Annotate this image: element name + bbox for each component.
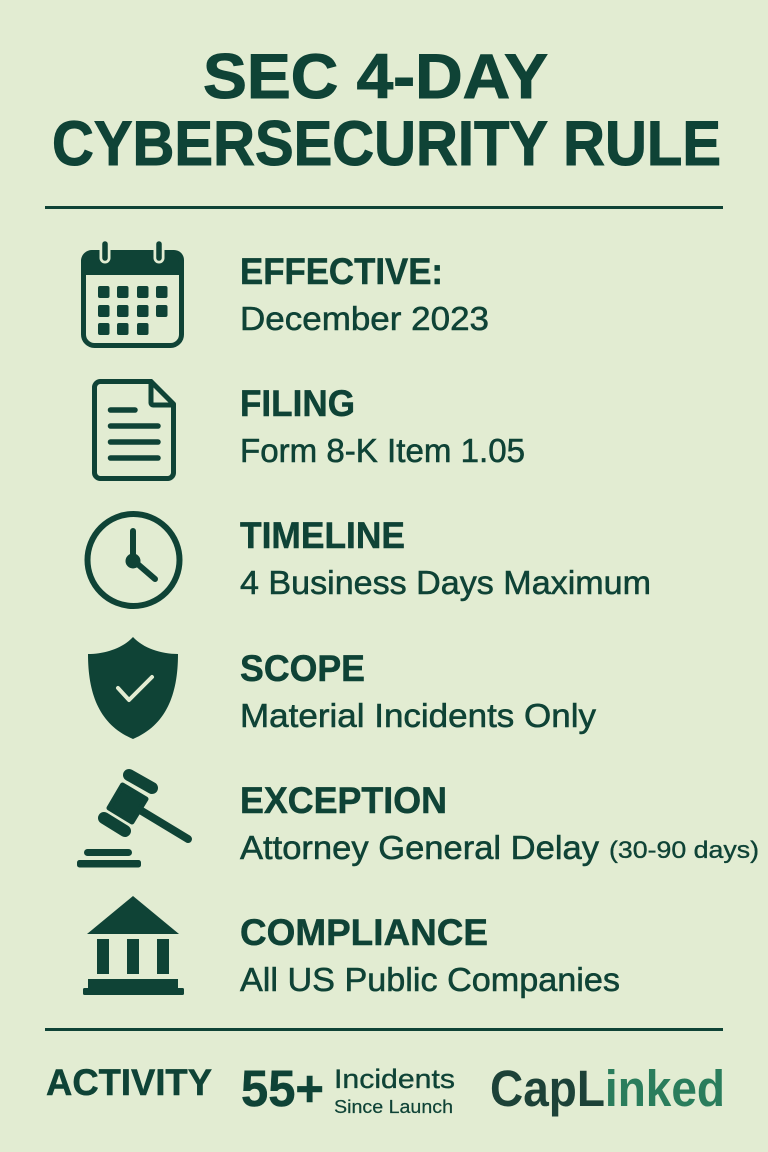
text: timeline value: 4 Business Days Maximum — [240, 564, 651, 601]
stat: 55+: 55+ — [241, 1060, 324, 1117]
text: exception days: (30-90 days) — [609, 837, 759, 864]
heading: filing: FILING — [240, 383, 355, 424]
heading: timeline: TIMELINE — [240, 515, 405, 556]
logo: CapLinked: CapLinked — [490, 1060, 725, 1117]
row: scope — [88, 637, 597, 739]
stat label: incidents: Incidents — [334, 1064, 455, 1094]
icon: calendar — [81, 243, 184, 346]
row: timeline — [88, 514, 651, 606]
row: filing — [94, 382, 525, 478]
title: CYBERSECURITY RULE — [52, 109, 721, 179]
icon: bank — [83, 896, 184, 995]
title — [52, 42, 721, 179]
text: scope value: Material Incidents Only — [240, 697, 597, 734]
heading: exception: EXCEPTION — [240, 780, 447, 821]
text: filing form: Form 8-K Item 1.05 — [240, 432, 525, 469]
title: SEC 4-DAY — [203, 42, 548, 112]
icon: gavel — [77, 775, 188, 868]
row: effective — [81, 243, 489, 346]
heading: compliance: COMPLIANCE — [240, 912, 488, 953]
row: exception — [77, 775, 759, 868]
text: effective date: December 2023 — [240, 300, 489, 337]
heading: scope: SCOPE — [240, 648, 365, 689]
activity label: ACTIVITY — [46, 1062, 212, 1103]
heading: effective: EFFECTIVE: — [240, 251, 443, 292]
row: compliance — [83, 896, 620, 998]
footer: activity — [46, 1060, 455, 1117]
text: exception value: Attorney General Delay — [240, 829, 600, 866]
text: compliance value: All US Public Companies — [240, 961, 620, 998]
icon: clock — [88, 514, 180, 606]
icon: document — [94, 382, 174, 478]
stat label: since launch: Since Launch — [334, 1097, 453, 1117]
icon: shield — [88, 637, 178, 739]
